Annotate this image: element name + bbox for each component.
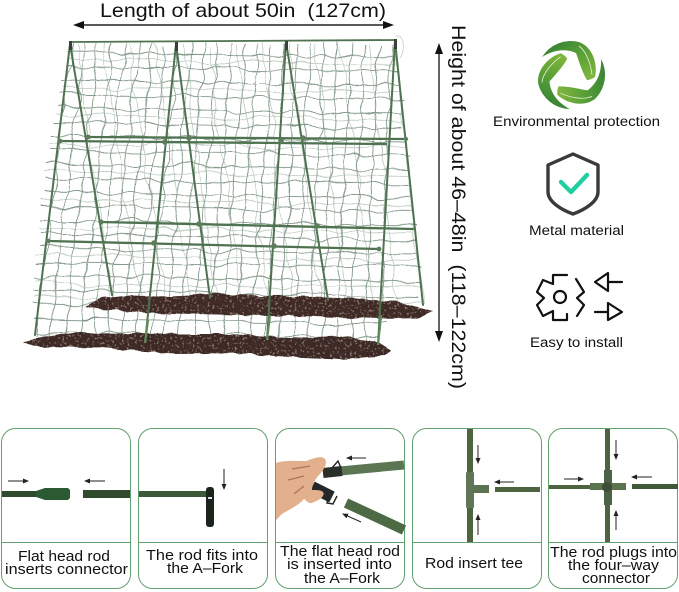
hand shading xyxy=(288,466,310,494)
width arrow xyxy=(73,21,394,29)
panel: rod into A-fork xyxy=(138,428,268,588)
caption: Flat head rod xyxy=(18,549,110,565)
label: environmental protection: Environmental protection xyxy=(493,114,660,129)
arrows xyxy=(615,440,617,459)
arrows xyxy=(347,457,366,459)
height arrow xyxy=(435,43,443,342)
panel: flat head rod xyxy=(2,428,130,588)
caption: the A–Fork xyxy=(167,561,244,577)
apex forks xyxy=(69,39,397,51)
icon: recycling leaves xyxy=(529,41,615,117)
fork wire loops xyxy=(327,461,341,504)
width dimension label: Length of about 50in (127cm) xyxy=(100,0,386,22)
frame rods xyxy=(35,40,423,345)
label: metal material: Metal material xyxy=(529,223,624,238)
arrow xyxy=(223,469,225,489)
hand xyxy=(276,457,326,520)
icon: gear with arrows xyxy=(537,273,622,320)
caption: is inserted into xyxy=(287,557,392,573)
label: easy to install: Easy to install xyxy=(530,335,623,350)
netting xyxy=(34,44,423,345)
caption: the four–way xyxy=(568,558,660,574)
arrows xyxy=(477,445,479,463)
caption xyxy=(5,549,128,578)
caption xyxy=(280,544,400,587)
caption: The rod plugs into xyxy=(550,545,677,561)
height dimension label: Height of about 46–48in (118–122cm) xyxy=(447,25,469,389)
panel: rod insert tee xyxy=(412,428,542,588)
panel: flat head rod into A-fork xyxy=(276,428,404,588)
caption: connector xyxy=(582,571,650,587)
caption: The flat head rod xyxy=(280,544,400,560)
panel: four-way connector xyxy=(548,428,678,588)
four-way connector and rods xyxy=(549,429,678,543)
caption: the A–Fork xyxy=(304,571,381,587)
front legs over soil xyxy=(145,315,381,345)
caption xyxy=(146,548,258,577)
arrows xyxy=(8,480,105,482)
caption xyxy=(550,545,677,587)
rods xyxy=(312,465,404,530)
tee and rods xyxy=(466,429,540,543)
rods and connector xyxy=(2,488,130,500)
icon: shield with check xyxy=(548,154,598,214)
caption: inserts connector xyxy=(5,562,128,578)
rear soil bed xyxy=(85,294,433,319)
trellis photo xyxy=(23,36,433,359)
frame connectors xyxy=(46,135,408,251)
caption: Rod insert tee xyxy=(425,556,523,572)
caption: The rod fits into xyxy=(146,548,258,564)
tie loop xyxy=(396,36,403,58)
front soil bed xyxy=(23,332,390,359)
rod and fork xyxy=(139,487,214,527)
